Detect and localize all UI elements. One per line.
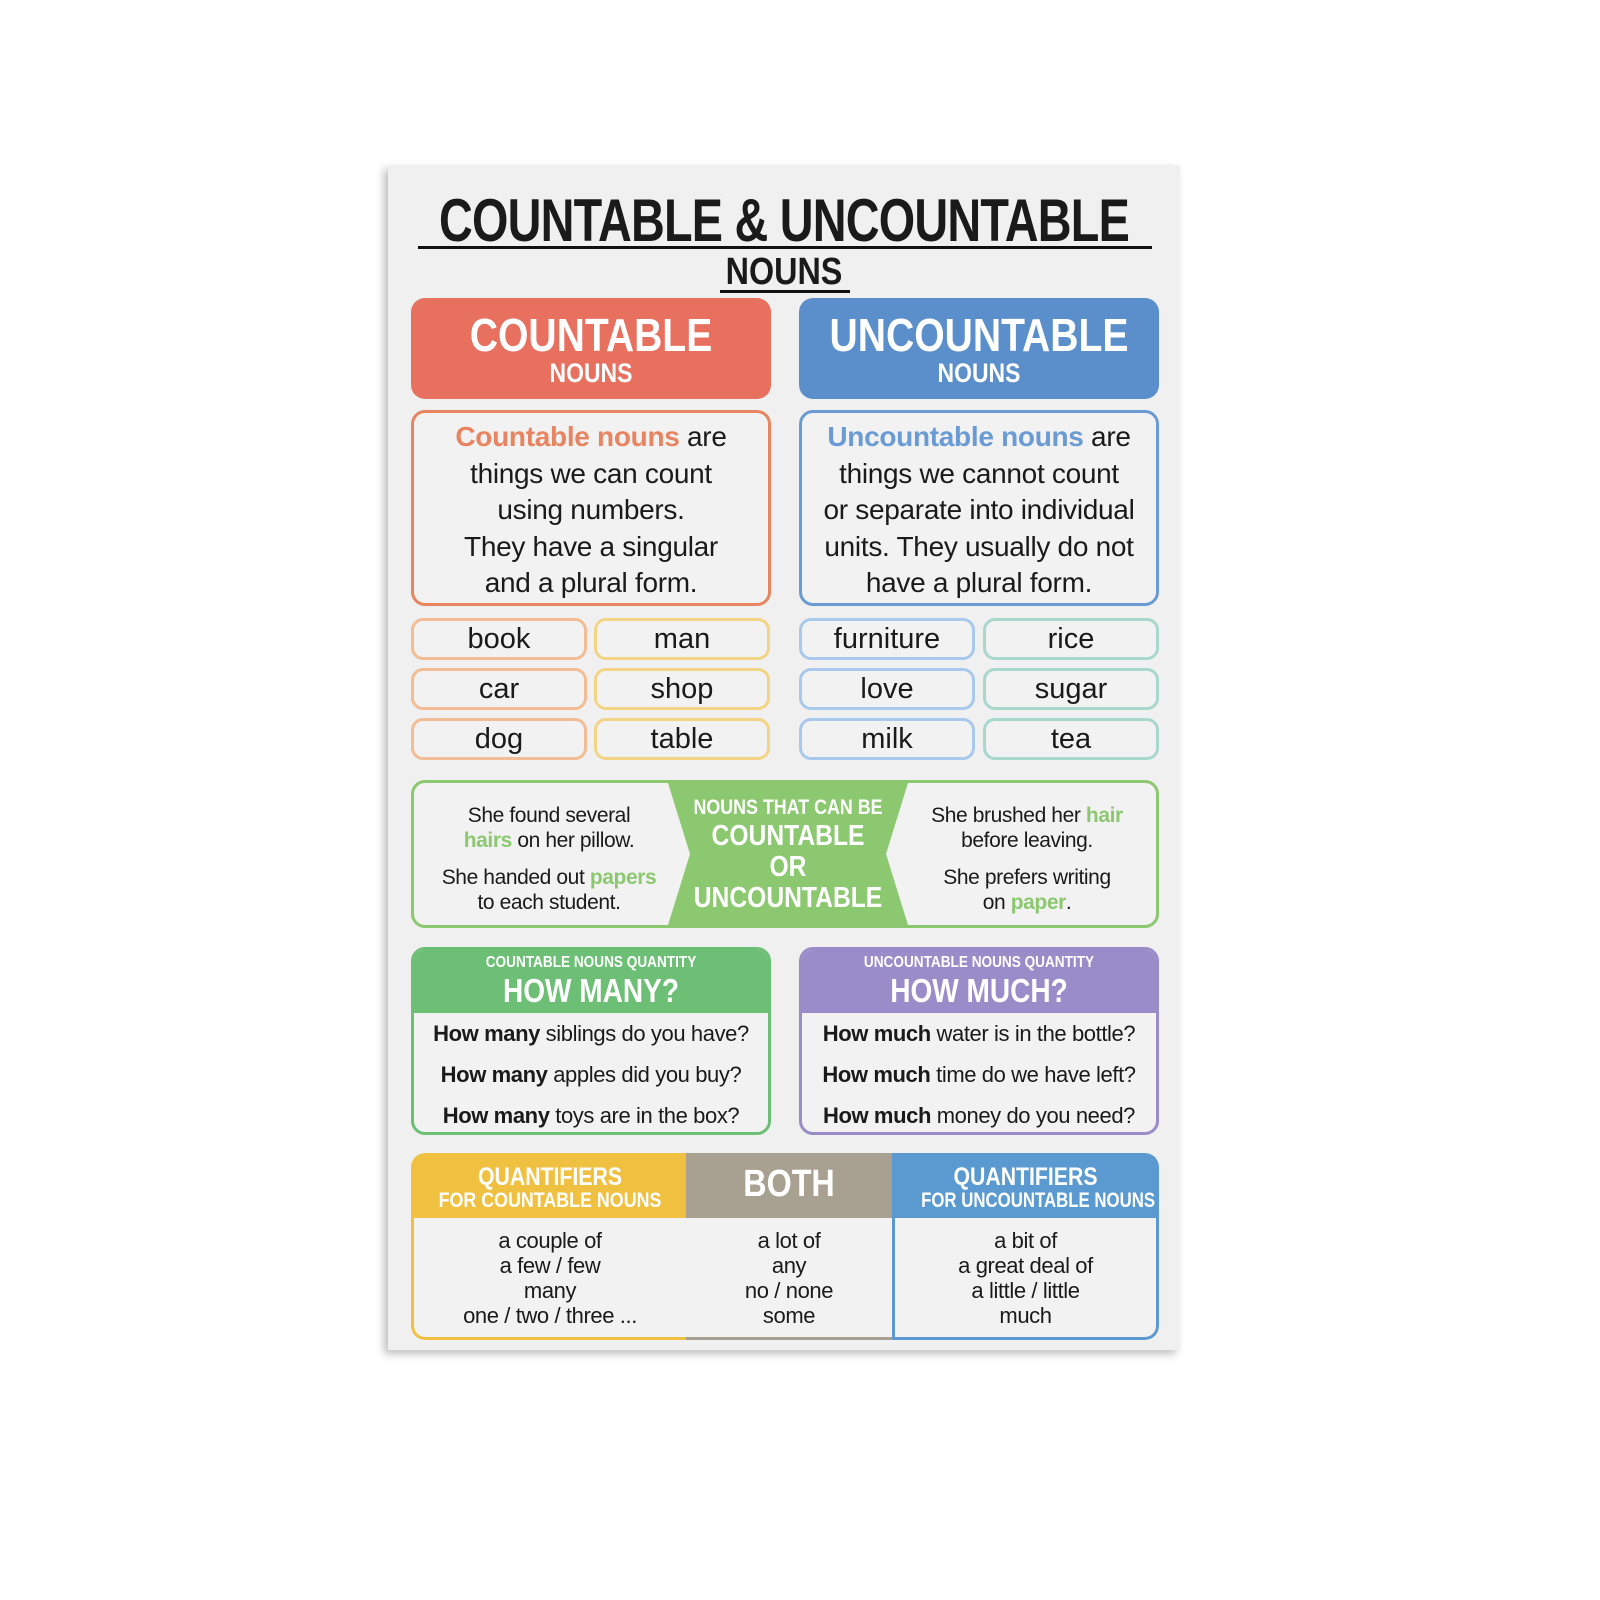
word pills: countable: book: [468, 623, 530, 655]
header: COUNTABLE NOUNS QUANTITY: [486, 954, 696, 971]
right examples: [931, 804, 1123, 914]
definition: uncountable: or separate into individual: [824, 494, 1134, 525]
center label: COUNTABLE: [712, 820, 864, 852]
column: uncountable quantifiers: much: [999, 1303, 1052, 1328]
column: both: BOTH: [743, 1163, 835, 1205]
left examples: hairs on her pillow.: [464, 829, 634, 852]
column: uncountable quantifiers: [892, 1153, 1159, 1340]
column: uncountable quantifiers: a bit of: [994, 1228, 1057, 1253]
left examples: She handed out papers: [442, 866, 656, 889]
word pills: countable: car: [479, 673, 519, 705]
header: uncountable: UNCOUNTABLE: [829, 309, 1129, 361]
center label: [693, 796, 883, 914]
column: countable quantifiers: QUANTIFIERS: [478, 1163, 622, 1191]
panel: quantifiers table: [411, 1153, 1159, 1340]
header: UNCOUNTABLE NOUNS QUANTITY: [864, 954, 1094, 971]
definition: uncountable: [799, 410, 1159, 606]
header: HOW MANY?: [503, 972, 679, 1009]
definition: countable: They have a singular: [464, 530, 718, 562]
questions: How many siblings do you have?: [433, 1021, 749, 1046]
word pills: uncountable: sugar: [1035, 673, 1107, 705]
word pills: uncountable: rice: [1048, 623, 1094, 655]
column: uncountable quantifiers: QUANTIFIERS: [953, 1163, 1098, 1191]
column: uncountable quantifiers: a great deal of: [958, 1253, 1093, 1278]
center label: UNCOUNTABLE: [694, 882, 882, 914]
word pills: uncountable: tea: [1051, 723, 1091, 755]
left examples: She found several: [468, 804, 630, 827]
column: uncountable quantifiers: FOR UNCOUNTABLE NOUNS: [921, 1189, 1155, 1212]
right examples: She prefers writing: [943, 866, 1111, 889]
definition: countable: Countable nouns are: [455, 421, 727, 452]
questions: [433, 1021, 749, 1128]
title: NOUNS: [726, 251, 842, 293]
header: countable: COUNTABLE: [470, 309, 712, 361]
definition: uncountable: units. They usually do not: [824, 530, 1134, 562]
poster: [388, 165, 1180, 1350]
questions: How many apples did you buy?: [441, 1062, 741, 1087]
word pills: uncountable: furniture: [834, 623, 940, 655]
questions: How much water is in the bottle?: [823, 1021, 1135, 1046]
column: countable quantifiers: one / two / three ...: [463, 1303, 637, 1328]
word pills: uncountable: love: [860, 673, 914, 705]
panel: both countable and uncountable: [411, 780, 1159, 928]
title: [418, 187, 1152, 293]
header: [802, 950, 1156, 1013]
center label: NOUNS THAT CAN BE: [693, 796, 883, 819]
panel: how much: [799, 947, 1159, 1135]
word pills: countable: man: [654, 623, 710, 655]
column: both: a lot of: [758, 1228, 820, 1253]
definition: uncountable: have a plural form.: [866, 567, 1092, 598]
header: [414, 950, 768, 1013]
right examples: on paper.: [983, 891, 1071, 914]
column: countable quantifiers: [411, 1153, 686, 1340]
header: countable: [411, 298, 771, 399]
right examples: She brushed her hair: [931, 804, 1123, 827]
definition: countable: [411, 410, 771, 606]
questions: [822, 1021, 1136, 1128]
word pills: uncountable: [799, 618, 1159, 760]
word pills: countable: [411, 618, 770, 760]
column: uncountable quantifiers: a little / little: [971, 1278, 1080, 1303]
column: both: any: [772, 1253, 806, 1278]
word pills: countable: dog: [475, 723, 523, 755]
header: uncountable: NOUNS: [938, 358, 1020, 388]
right examples: before leaving.: [961, 829, 1093, 852]
column: both: [686, 1153, 892, 1340]
word pills: uncountable: milk: [861, 723, 913, 755]
word pills: countable: shop: [651, 673, 713, 705]
definition: uncountable: things we cannot count: [839, 458, 1119, 488]
questions: How much money do you need?: [823, 1103, 1135, 1128]
definition: uncountable: Uncountable nouns are: [827, 421, 1131, 452]
center label: OR: [770, 851, 806, 883]
header: countable: NOUNS: [550, 358, 632, 388]
word pills: countable: table: [651, 723, 713, 755]
definition: countable: things we can count: [470, 458, 712, 488]
panel: how many: [411, 947, 771, 1135]
column: countable quantifiers: many: [524, 1278, 576, 1303]
column: countable quantifiers: a few / few: [500, 1253, 600, 1278]
left examples: [442, 804, 656, 914]
definition: countable: using numbers.: [497, 494, 685, 525]
questions: How many toys are in the box?: [443, 1103, 739, 1128]
green chevron: [668, 783, 908, 925]
column: countable quantifiers: FOR COUNTABLE NOUNS: [439, 1189, 661, 1212]
left examples: to each student.: [477, 891, 621, 914]
header: HOW MUCH?: [890, 972, 1068, 1009]
column: both: no / none: [745, 1278, 833, 1303]
column: both: some: [763, 1303, 815, 1328]
definition: countable: and a plural form.: [485, 567, 697, 598]
questions: How much time do we have left?: [822, 1062, 1136, 1087]
header: uncountable: [799, 298, 1159, 399]
column: countable quantifiers: a couple of: [498, 1228, 602, 1253]
title: COUNTABLE & UNCOUNTABLE: [439, 187, 1129, 254]
